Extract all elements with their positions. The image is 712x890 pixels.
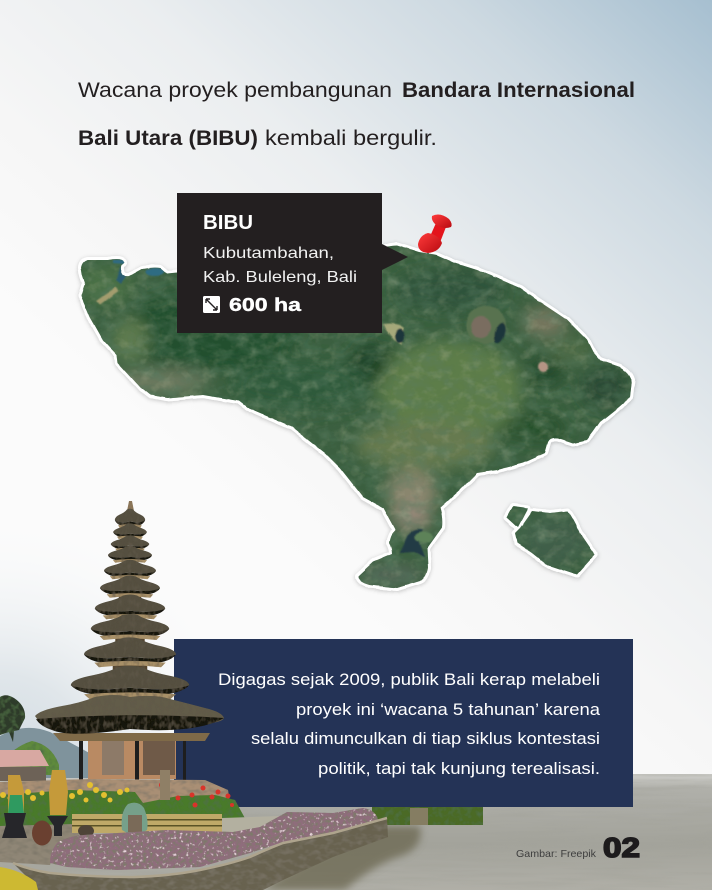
callout location: Kab. Buleleng, Bali bbox=[203, 269, 357, 286]
temple walls and pillars bbox=[53, 733, 210, 788]
title: kembali bergulir. bbox=[265, 126, 437, 150]
temple finial bbox=[127, 501, 134, 511]
caption text: proyek ini ‘wacana 5 tahunan’ karena bbox=[296, 701, 601, 719]
title: Bandara Internasional bbox=[402, 78, 635, 102]
title bbox=[78, 78, 635, 150]
image credit: Gambar: Freepik bbox=[516, 848, 597, 860]
pink flower bed bbox=[50, 808, 378, 870]
icon: area bbox=[203, 296, 220, 313]
temple tiers bbox=[71, 509, 189, 707]
callout heading: BIBU bbox=[203, 212, 253, 234]
garden foliage bbox=[0, 782, 247, 826]
main roof bbox=[35, 695, 224, 734]
caption text: politik, tapi tak kunjung terealisasi. bbox=[318, 760, 600, 778]
caption text bbox=[218, 671, 601, 778]
lake water bbox=[0, 774, 712, 890]
right path bbox=[222, 816, 290, 834]
left paving bbox=[0, 824, 80, 865]
title: Bali Utara (BIBU) bbox=[78, 126, 258, 150]
map of Bali bbox=[70, 240, 640, 595]
hedge behind caption bbox=[372, 806, 483, 825]
statues and pots bbox=[2, 770, 170, 846]
location callout bbox=[177, 193, 408, 333]
map pin bbox=[418, 215, 452, 253]
caption text: Digagas sejak 2009, publik Bali kerap melabeli bbox=[218, 671, 600, 689]
area value: 600 ha bbox=[229, 294, 302, 315]
bamboo platform bbox=[72, 814, 222, 833]
caption panel bbox=[174, 639, 633, 807]
temple platform bbox=[0, 779, 230, 812]
callout location bbox=[203, 245, 357, 286]
callout location: Kubutambahan, bbox=[203, 245, 334, 262]
temple photo bbox=[0, 501, 388, 890]
wall top edge bbox=[13, 818, 387, 877]
stone wall bbox=[13, 818, 388, 890]
caption text: selalu dimunculkan di tiap siklus kontestasi bbox=[251, 730, 600, 748]
page number: 02 bbox=[603, 832, 640, 863]
yellow shrub bbox=[0, 867, 38, 890]
title: Wacana proyek pembangunan bbox=[78, 78, 392, 102]
background haze at lower left bbox=[0, 480, 280, 890]
distant mountain and trees bbox=[0, 695, 93, 781]
